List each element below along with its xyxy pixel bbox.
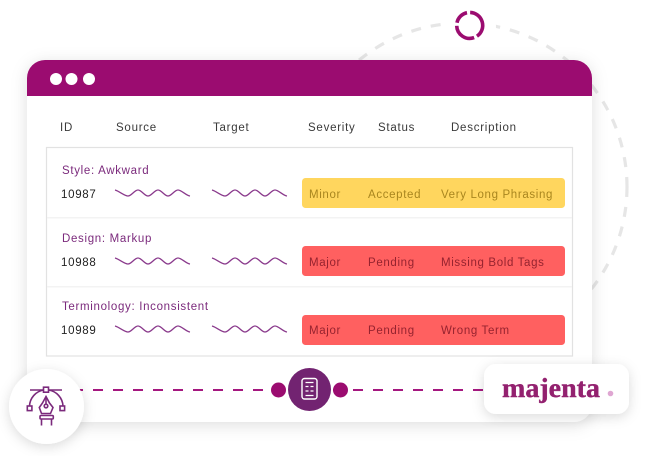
row: 10988: Design: Markup <box>62 233 152 245</box>
row: 10987: Very Long Phrasing <box>441 189 553 201</box>
table column headers: Target <box>213 122 250 134</box>
major severity pill <box>302 315 565 345</box>
window body <box>27 60 592 422</box>
dashed connector <box>73 389 490 391</box>
dashed orbit circle <box>299 23 627 351</box>
row: 10989: Wrong Term <box>441 325 510 337</box>
table frame <box>46 148 572 356</box>
row: 10989: 10989 <box>61 325 96 337</box>
row: 10989: Major <box>309 325 341 337</box>
row: 10988: Missing Bold Tags <box>441 257 545 269</box>
row: 10989: Pending <box>368 325 415 337</box>
white halo behind loader ring <box>444 0 496 52</box>
logo wordmark: majenta <box>502 373 601 403</box>
table column headers: Description <box>451 122 517 134</box>
row: 10987: Accepted <box>368 189 421 201</box>
row: 10987 <box>61 165 565 208</box>
row: 10987: Style: Awkward <box>62 165 149 177</box>
icon: pen tool badge <box>9 369 84 444</box>
panel: application window <box>27 60 592 422</box>
window control dots <box>50 73 95 85</box>
table column headers: Status <box>378 122 415 134</box>
table column headers: Severity <box>308 122 356 134</box>
icon: loader ring <box>457 12 483 38</box>
row: 10988: Major <box>309 257 341 269</box>
minor severity pill <box>302 178 565 208</box>
row: 10988 <box>61 233 565 276</box>
window title bar <box>27 60 592 96</box>
table column headers: Source <box>116 122 157 134</box>
row: 10989 <box>61 301 565 345</box>
row: 10989: Terminology: Inconsistent <box>62 301 209 313</box>
row: 10987: Minor <box>309 189 341 201</box>
major severity pill <box>302 246 565 276</box>
icon: document in circle <box>288 368 331 411</box>
connector node dots <box>271 382 348 398</box>
row: 10987: 10987 <box>61 189 96 201</box>
row: 10988: 10988 <box>61 257 96 269</box>
table column headers <box>60 122 517 134</box>
logo card <box>484 364 629 414</box>
logo dot <box>608 391 613 396</box>
table column headers: ID <box>60 122 73 134</box>
row: 10988: Pending <box>368 257 415 269</box>
